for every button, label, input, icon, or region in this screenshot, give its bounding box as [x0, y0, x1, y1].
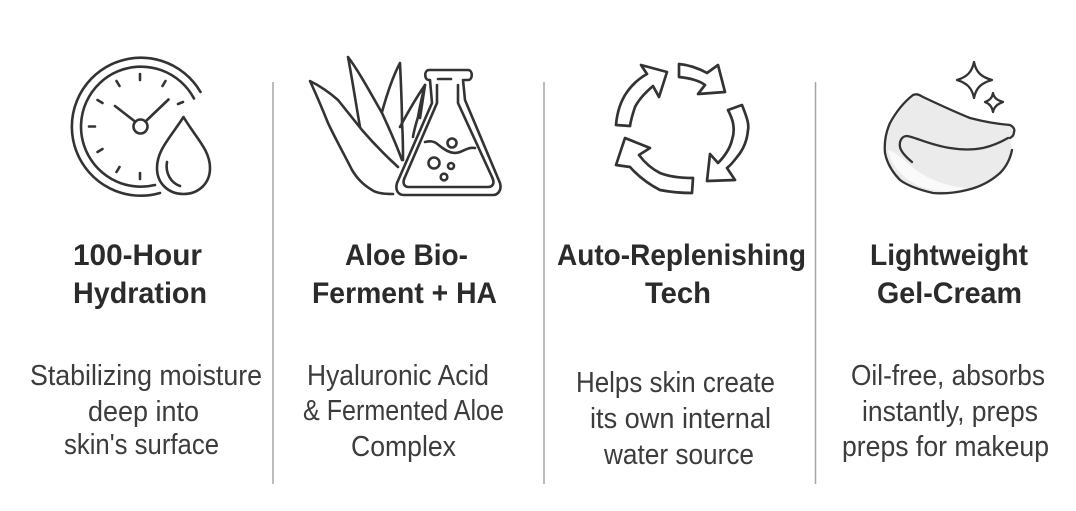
- heading: 100-Hour Hydration: 100-Hour: [73, 239, 202, 272]
- heading: Auto-Replenishing Tech: Tech: [645, 277, 711, 310]
- heading: 100-Hour Hydration: Hydration: [73, 277, 207, 310]
- heading: Lightweight Gel-Cream: Lightweight: [870, 239, 1028, 272]
- text: hydration description: Stabilizing moisture: [30, 360, 262, 392]
- text: hydration description: deep into: [88, 396, 199, 428]
- heading: Aloe Bio-Ferment + HA: Ferment + HA: [312, 277, 497, 310]
- text: aloe description: & Fermented Aloe: [303, 395, 504, 427]
- heading: Lightweight Gel-Cream: Gel-Cream: [877, 277, 1022, 310]
- text: replenishing description: [576, 367, 775, 471]
- text: gel-cream description: [842, 360, 1049, 463]
- icon: four circular arrows: [616, 64, 748, 193]
- icon: gel-cream swatch with sparkles: [885, 62, 1014, 193]
- icon: aloe leaves and flask: [310, 57, 501, 195]
- heading: Auto-Replenishing Tech: Auto-Replenishing: [557, 239, 806, 272]
- heading: Aloe Bio-Ferment + HA: [312, 239, 497, 310]
- text: hydration description: skin's surface: [64, 429, 219, 461]
- text: aloe description: Complex: [351, 431, 456, 463]
- text: replenishing description: its own internal: [590, 403, 771, 435]
- heading: Lightweight Gel-Cream: [870, 239, 1028, 310]
- panel: Lightweight Gel-Cream: [842, 62, 1049, 463]
- heading: Auto-Replenishing Tech: [557, 239, 806, 310]
- text: replenishing description: water source: [603, 439, 754, 471]
- text: hydration description: [30, 360, 262, 461]
- text: replenishing description: Helps skin create: [576, 367, 775, 399]
- icon: clock with water drop: [72, 58, 210, 196]
- panel: Aloe Bio-Ferment + HA: [303, 57, 504, 463]
- panel: 100-Hour Hydration: [30, 58, 262, 461]
- text: gel-cream description: preps for makeup: [842, 431, 1049, 463]
- text: aloe description: [303, 360, 504, 463]
- text: gel-cream description: instantly, preps: [862, 396, 1038, 428]
- text: aloe description: Hyaluronic Acid: [307, 360, 489, 392]
- text: gel-cream description: Oil-free, absorbs: [851, 360, 1045, 392]
- heading: 100-Hour Hydration: [73, 239, 207, 310]
- panel: Auto-Replenishing Tech: [557, 64, 806, 471]
- heading: Aloe Bio-Ferment + HA: Aloe Bio-: [345, 239, 468, 272]
